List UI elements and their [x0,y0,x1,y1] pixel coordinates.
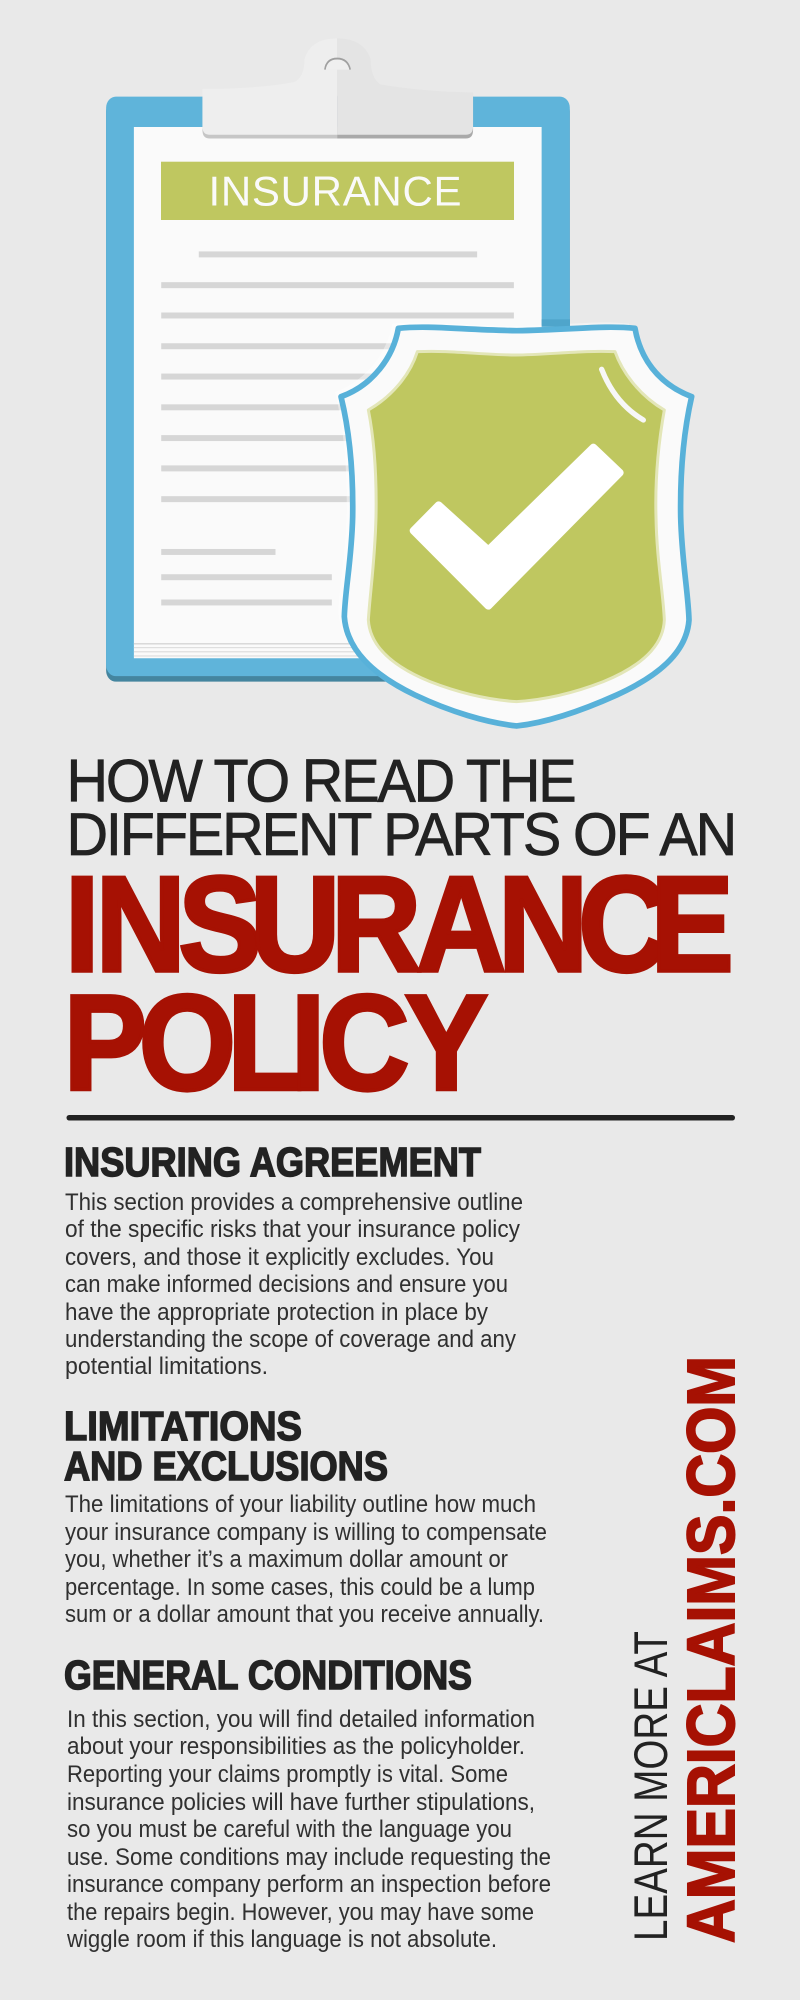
section: insuring agreement [64,1139,523,1380]
heading: GENERAL CONDITIONS [64,1652,472,1698]
body text: percentage. In some cases, this could be a lump [65,1574,535,1601]
title emphasis: insurance: INSURANCE [65,848,734,1000]
heading: AND EXCLUSIONS [64,1443,388,1489]
clipboard with paper and clip [106,38,570,682]
body text: In this section, you will find detailed information [67,1706,535,1733]
body text: sum or a dollar amount that you receive annually. [65,1601,544,1628]
title emphasis: policy: POLICY [63,967,488,1119]
paper sheet with text lines [134,127,542,658]
body text: wiggle room if this language is not absolute. [66,1926,497,1953]
body text: potential limitations. [65,1353,268,1380]
banner: insurance [161,162,514,220]
heading [64,1403,388,1489]
check mark [413,447,620,606]
body text: your insurance company is willing to compensate [65,1519,547,1546]
body text: have the appropriate protection in place by [65,1299,488,1326]
body text [66,1706,551,1953]
call to action: vertical website text [624,1356,749,1943]
body text: understanding the scope of coverage and any [65,1326,516,1353]
illustration: insurance clipboard and shield [106,38,692,726]
banner: insurance: INSURANCE [208,168,462,215]
clipboard board [106,97,570,682]
section: limitations and exclusions [64,1403,547,1628]
title line 2: DIFFERENT PARTS OF AN [66,800,737,868]
title [63,746,737,1119]
body text: insurance company perform an inspection before [67,1871,551,1898]
body text: insurance policies will have further stipulations, [67,1789,535,1816]
body text: you, whether it’s a maximum dollar amount or [65,1546,508,1573]
clipboard clip [202,38,473,138]
body text [65,1491,547,1628]
learn more at: LEARN MORE AT [624,1631,677,1941]
body text: Reporting your claims promptly is vital. Some [67,1761,508,1788]
body text: so you must be careful with the language you [67,1816,512,1843]
heading: LIMITATIONS [64,1403,302,1449]
shield highlight [602,369,643,420]
section: general conditions [64,1652,551,1953]
heading: INSURING AGREEMENT [64,1139,481,1185]
americlaims.com: AMERICLAIMS.COM [674,1356,749,1943]
body text: the repairs begin. However, you may have some [67,1899,534,1926]
shield with check mark [335,319,692,726]
body text: covers, and those it explicitly excludes. You [65,1244,494,1271]
title line 1: HOW TO READ THE [66,746,577,815]
body text: of the specific risks that your insurance policy [65,1216,520,1243]
body text [65,1189,523,1380]
body text: The limitations of your liability outline how much [65,1491,536,1518]
body text: use. Some conditions may include requesting the [67,1844,551,1871]
body text: can make informed decisions and ensure you [65,1271,508,1298]
divider rule [66,1115,735,1120]
body text: about your responsibilities as the policyholder. [67,1733,525,1760]
body text: This section provides a comprehensive outline [65,1189,523,1216]
